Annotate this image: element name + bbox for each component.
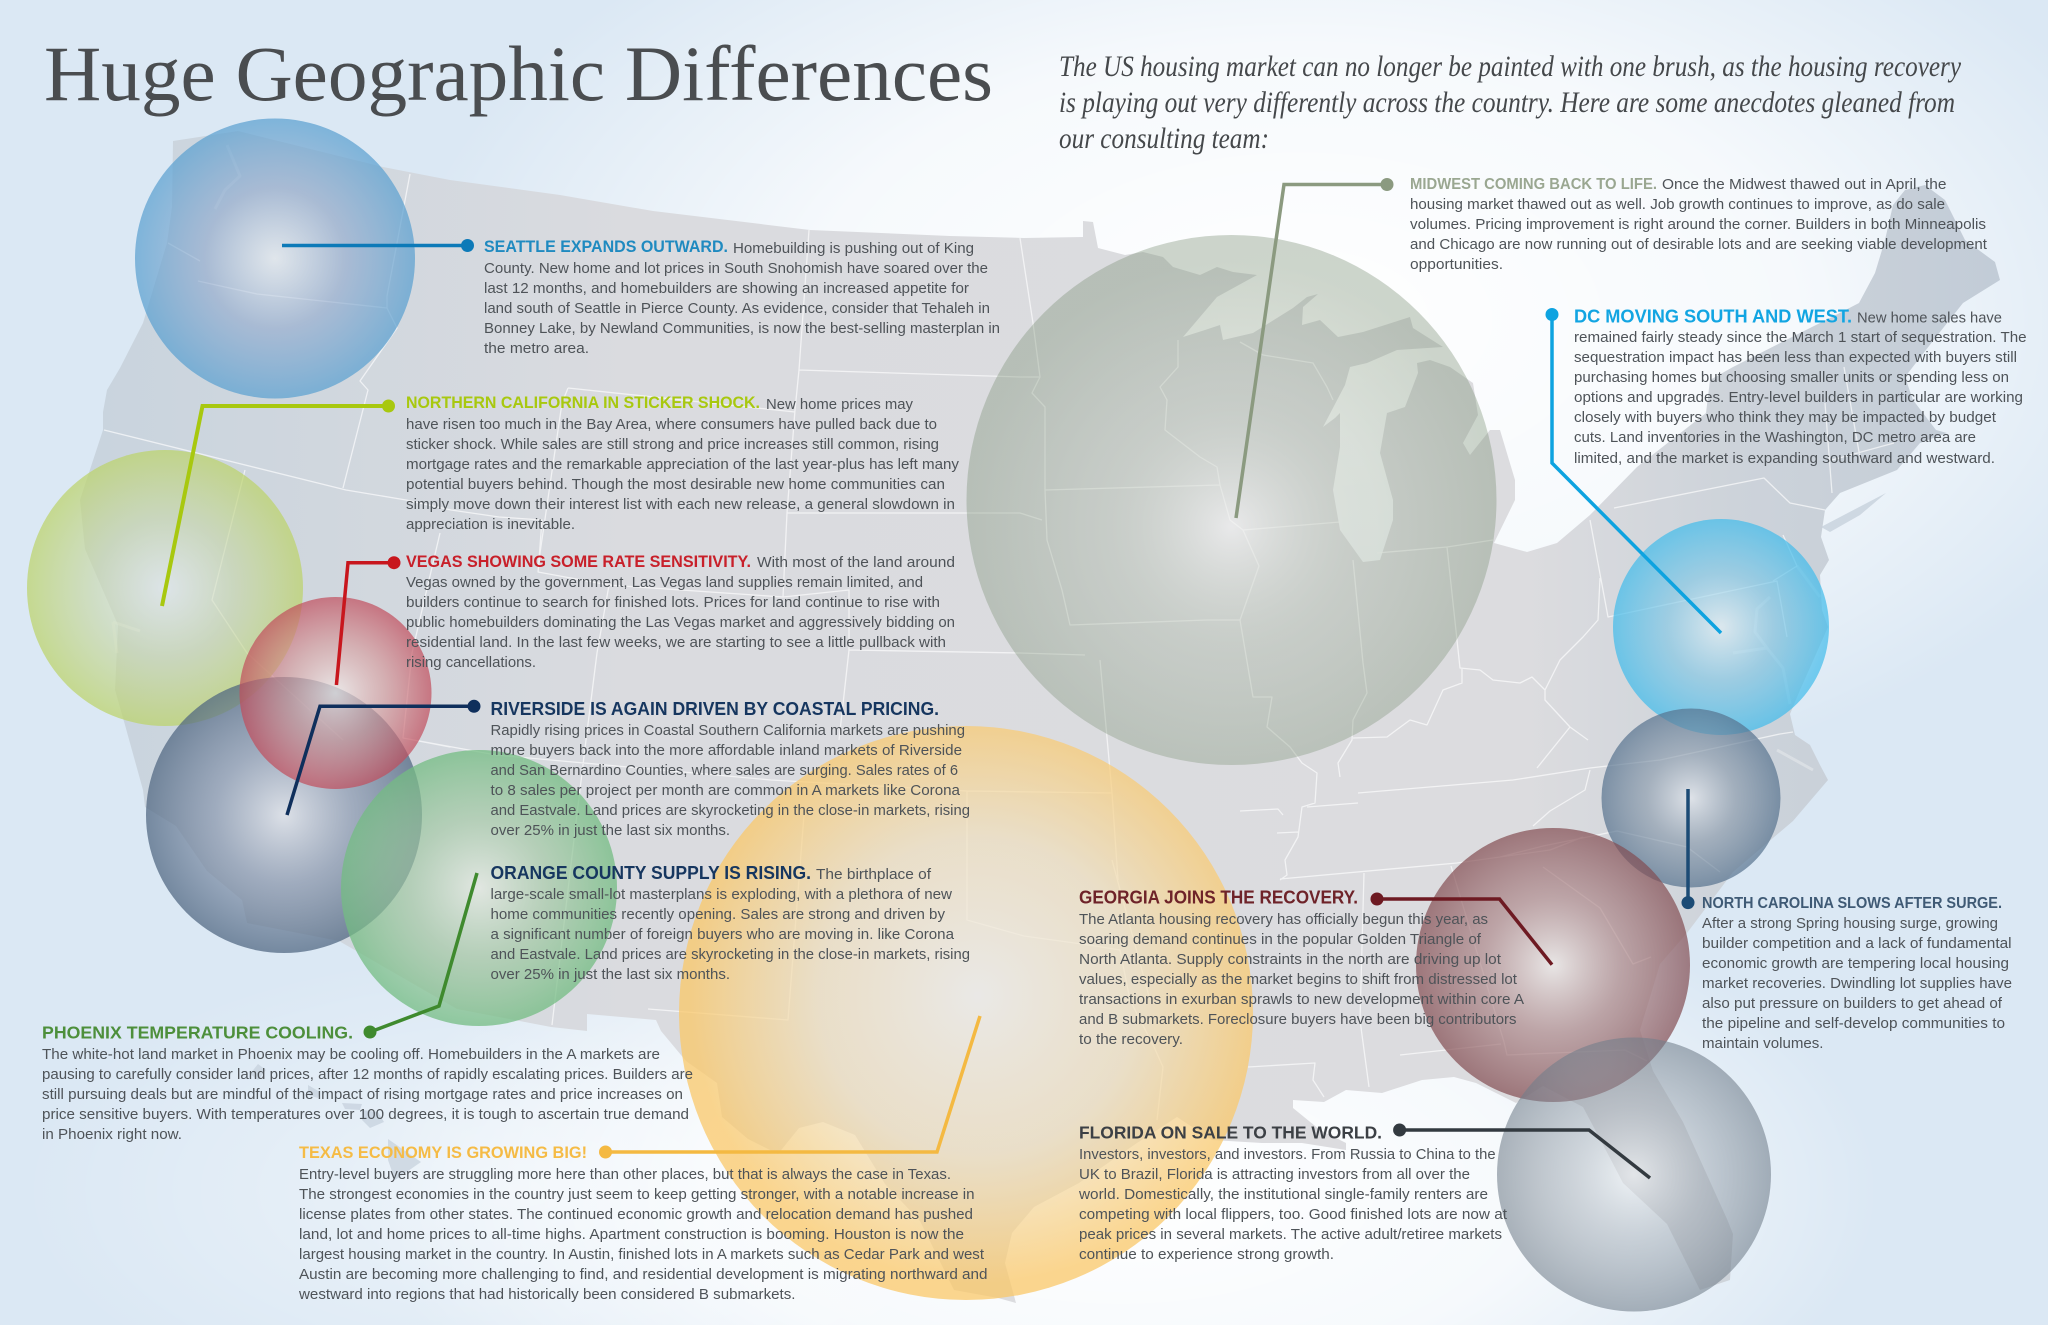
text: Texas: land, lot and home prices to all-time highs. Apartment construction is booming. Houston is now the — [299, 1226, 964, 1243]
text: Washington DC — [1574, 306, 2027, 467]
text: Las Vegas: builders continue to search for finished lots. Prices for land continue to rise with — [406, 594, 940, 611]
text: Washington DC: closely with buyers who think they may be impacted by budget — [1574, 409, 1997, 426]
text: Seattle — [484, 238, 1000, 357]
circle: Riverside — [146, 677, 422, 953]
text: Washington DC: sequestration impact has been less than expected with buyers still — [1574, 349, 2017, 366]
text: North Carolina — [1702, 895, 2012, 1052]
callout: Seattle — [282, 238, 1000, 357]
text: Seattle: the metro area. — [484, 340, 589, 357]
text: Georgia: and B submarkets. Foreclosure buyers have been big contributors — [1079, 1011, 1516, 1028]
text: Georgia — [1079, 888, 1524, 1048]
callout: Texas — [298, 1016, 988, 1303]
text: Orange County: a significant number of foreign buyers who are moving in. like Corona — [490, 926, 955, 943]
text: North Carolina: maintain volumes. — [1702, 1035, 1824, 1052]
connector: Midwest — [1236, 178, 1394, 518]
text: Georgia: GEORGIA JOINS THE RECOVERY. — [1079, 888, 1358, 908]
text: Midwest: and Chicago are now running out of desirable lots and are seeking viable development — [1410, 236, 1988, 253]
connector: Phoenix — [364, 873, 477, 1038]
text: Las Vegas: rising cancellations. — [406, 654, 536, 671]
callout: Florida — [1078, 1122, 1650, 1263]
callout: Midwest — [1236, 176, 1988, 518]
callout: Georgia — [1079, 888, 1552, 1048]
text: Riverside: more buyers back into the more affordable inland markets of Riverside — [490, 742, 962, 759]
text: Las Vegas — [406, 553, 955, 671]
text: Georgia: values, especially as the market begins to shift from distressed lot — [1079, 971, 1518, 988]
text: Phoenix — [42, 1022, 693, 1143]
title: Huge Geographic Differences — [44, 30, 993, 117]
text: Texas — [298, 1144, 988, 1303]
text: Orange County — [490, 863, 970, 983]
text: Florida: continue to experience strong growth. — [1079, 1246, 1334, 1263]
text: Las Vegas: public homebuilders dominating the Las Vegas market and aggressively bidding on — [406, 614, 955, 631]
circle: Seattle — [135, 118, 415, 398]
circle: Georgia — [1416, 828, 1690, 1102]
text: Northern California: simply move down their interest list with each new release, a general slowdown in — [406, 496, 955, 513]
text: Riverside — [490, 699, 970, 839]
text: Orange County: large-scale small-lot masterplans is exploding, with a plethora of new — [490, 886, 952, 903]
text: Phoenix: still pursuing deals but are mindful of the impact of rising mortgage rates and price increases on — [42, 1086, 683, 1103]
callout: Riverside — [287, 699, 970, 839]
connector: North Carolina — [1682, 789, 1694, 909]
callout: Washington DC — [1546, 306, 2027, 633]
text: Orange County: over 25% in just the last six months. — [490, 966, 730, 983]
intro text: our consulting team: — [1059, 122, 1269, 155]
text: Northern California: NORTHERN CALIFORNIA IN STICKER SHOCK. — [406, 394, 760, 412]
text: Las Vegas: residential land. In the last few weeks, we are starting to see a little pullback with — [406, 634, 946, 651]
callout: Phoenix — [42, 873, 693, 1143]
text: Midwest — [1410, 176, 1988, 273]
text: Washington DC: options and upgrades. Entry-level builders in particular are working — [1574, 389, 2023, 406]
text: Texas: The strongest economies in the country just seem to keep getting stronger, with a notable increase in — [299, 1186, 974, 1203]
text: Las Vegas: Vegas owned by the government, Las Vegas land supplies remain limited, and — [406, 574, 923, 591]
text: Riverside: and San Bernardino Counties, where sales are surging. Sales rates of 6 — [490, 762, 958, 779]
callout: Northern California — [162, 394, 959, 606]
connector: Florida — [1393, 1124, 1650, 1178]
text: Orange County: and Eastvale. Land prices are skyrocketing in the close-in markets, rising — [490, 946, 970, 963]
text: Seattle: last 12 months, and homebuilders are showing an increased appetite for — [484, 280, 969, 297]
text: Midwest: MIDWEST COMING BACK TO LIFE. — [1410, 176, 1657, 193]
text: Georgia: The Atlanta housing recovery has officially begun this year, as — [1079, 911, 1488, 928]
text: Orange County: The birthplace of — [816, 866, 932, 883]
connector: Northern California — [162, 400, 395, 606]
text: Phoenix: price sensitive buyers. With temperatures over 100 degrees, it is tough to ascertain true demand — [42, 1106, 689, 1123]
text: Riverside: RIVERSIDE IS AGAIN DRIVEN BY COASTAL PRICING. — [490, 699, 939, 719]
text: Washington DC: limited, and the market is expanding southward and westward. — [1574, 450, 1995, 467]
text: Phoenix: in Phoenix right now. — [42, 1126, 182, 1143]
text: Orange County: ORANGE COUNTY SUPPLY IS RISING. — [490, 863, 811, 883]
text: North Carolina: economic growth are tempering local housing — [1702, 955, 2009, 972]
text: Phoenix: PHOENIX TEMPERATURE COOLING. — [42, 1022, 353, 1042]
icon: Hawaiian islands — [250, 1064, 421, 1180]
text: Texas: license plates from other states. The continued economic growth and relocation demand has pushed — [299, 1206, 973, 1223]
text: Texas: westward into regions that had historically been considered B submarkets. — [298, 1286, 796, 1303]
text: Northern California: appreciation is inevitable. — [406, 516, 575, 533]
text: Phoenix: The white-hot land market in Phoenix may be cooling off. Homebuilders in the A markets are — [42, 1046, 660, 1063]
circle: Washington DC — [1613, 519, 1829, 735]
text: North Carolina: the pipeline and self-develop communities to — [1702, 1015, 2005, 1032]
text: Seattle: SEATTLE EXPANDS OUTWARD. — [484, 238, 728, 256]
circle: North Carolina — [1602, 708, 1780, 888]
text: Seattle: land south of Seattle in Pierce County. As evidence, consider that Tehaleh in — [484, 300, 990, 317]
text: Midwest: volumes. Pricing improvement is right around the corner. Builders in both Minneapolis — [1410, 216, 1986, 233]
text: Riverside: over 25% in just the last six months. — [490, 822, 730, 839]
intro text — [1059, 50, 1962, 155]
text: Florida — [1078, 1122, 1508, 1263]
text: North Carolina: builder competition and a lack of fundamental — [1702, 935, 2012, 952]
text: Midwest: Once the Midwest thawed out in April, the — [1662, 176, 1946, 193]
text: Riverside: Rapidly rising prices in Coastal Southern California markets are pushing — [490, 722, 965, 739]
text: Northern California: New home prices may — [766, 396, 913, 413]
connector: Seattle — [282, 239, 474, 252]
circle: Phoenix — [341, 750, 617, 1026]
text: Northern California: mortgage rates and the remarkable appreciation of the last year-plus has left many — [406, 456, 959, 473]
circle: Florida — [1497, 1038, 1771, 1312]
text: Northern California: have risen too much in the Bay Area, where consumers have pulled back due to — [406, 416, 937, 433]
text: Orange County: home communities recently opening. Sales are strong and driven by — [490, 906, 945, 923]
text: Seattle: County. New home and lot prices in South Snohomish have soared over the — [484, 260, 988, 277]
connector: Georgia — [1370, 892, 1552, 965]
connector: Texas — [599, 1016, 980, 1158]
text: Florida: FLORIDA ON SALE TO THE WORLD. — [1079, 1122, 1382, 1142]
text: Northern California: sticker shock. While sales are still strong and price increases still common, rising — [406, 436, 939, 453]
text: Washington DC: DC MOVING SOUTH AND WEST. — [1574, 306, 1852, 326]
text: Midwest: opportunities. — [1410, 256, 1503, 273]
text: Northern California: potential buyers behind. Though the most desirable new home communities can — [406, 476, 945, 493]
callout: North Carolina — [1682, 789, 2012, 1052]
connector: Las Vegas — [336, 556, 400, 685]
text: Riverside: to 8 sales per project per month are common in A markets like Corona — [490, 782, 961, 799]
text: Las Vegas: With most of the land around — [757, 554, 955, 571]
circle: Texas — [679, 726, 1253, 1300]
connector: Riverside — [287, 700, 480, 815]
text: Georgia: soaring demand continues in the popular Golden Triangle of — [1079, 931, 1482, 948]
text: Texas: Austin are becoming more challenging to find, and residential development is migrating northward and — [299, 1266, 988, 1283]
callout: Las Vegas — [336, 553, 955, 685]
text: Florida: peak prices in several markets. The active adult/retiree markets — [1079, 1226, 1502, 1243]
circle: Las Vegas — [240, 597, 432, 789]
text: Georgia: North Atlanta. Supply constraints in the north are driving up lot — [1079, 951, 1502, 968]
text: Washington DC: remained fairly steady since the March 1 start of sequestration. The — [1574, 329, 2027, 346]
text: Florida: world. Domestically, the institutional single-family renters are — [1078, 1186, 1488, 1203]
text: Las Vegas: VEGAS SHOWING SOME RATE SENSITIVITY. — [406, 553, 751, 571]
connector: Washington DC — [1546, 308, 1721, 633]
text: North Carolina: After a strong Spring housing surge, growing — [1702, 915, 1998, 932]
state lines — [104, 174, 1894, 1120]
text: Florida: Investors, investors, and investors. From Russia to China to the — [1079, 1146, 1496, 1163]
text: Midwest: housing market thawed out as well. Job growth continues to improve, as do sale — [1410, 196, 1945, 213]
circle: Northern California — [27, 450, 303, 726]
water details — [113, 145, 1820, 770]
text: Texas: largest housing market in the country. In Austin, finished lots in A markets such as Cedar Park and west — [299, 1246, 985, 1263]
text: North Carolina: NORTH CAROLINA SLOWS AFTER SURGE. — [1702, 895, 2002, 912]
text: Phoenix: pausing to carefully consider land prices, after 12 months of rapidly escalating prices. Builders are — [42, 1066, 693, 1083]
text: North Carolina: also put pressure on builders to get ahead of — [1702, 995, 2003, 1012]
text: Texas: TEXAS ECONOMY IS GROWING BIG! — [299, 1144, 587, 1162]
text: Northern California — [406, 394, 959, 533]
text: Texas: Entry-level buyers are struggling more here than other places, but that is always the case in Texas. — [299, 1166, 951, 1183]
text: Florida: UK to Brazil, Florida is attracting investors from all over the — [1079, 1166, 1470, 1183]
text: North Carolina: market recoveries. Dwindling lot supplies have — [1702, 975, 2012, 992]
circle: Midwest — [966, 235, 1496, 765]
text: Georgia: to the recovery. — [1079, 1031, 1183, 1048]
text: Seattle: Homebuilding is pushing out of King — [733, 240, 974, 257]
text: Georgia: transactions in exurban sprawls to new development within core A — [1079, 991, 1524, 1008]
text: Washington DC: cuts. Land inventories in the Washington, DC metro area are — [1574, 429, 1976, 446]
text: Washington DC: purchasing homes but choosing smaller units or spending less on — [1574, 369, 2009, 386]
text: Washington DC: New home sales have — [1857, 310, 2002, 326]
text: Florida: competing with local flippers, too. Good finished lots are now at — [1079, 1206, 1508, 1223]
text: Riverside: and Eastvale. Land prices are skyrocketing in the close-in markets, rising — [490, 802, 970, 819]
text: Seattle: Bonney Lake, by Newland Communities, is now the best-selling masterplan in — [484, 320, 1000, 337]
